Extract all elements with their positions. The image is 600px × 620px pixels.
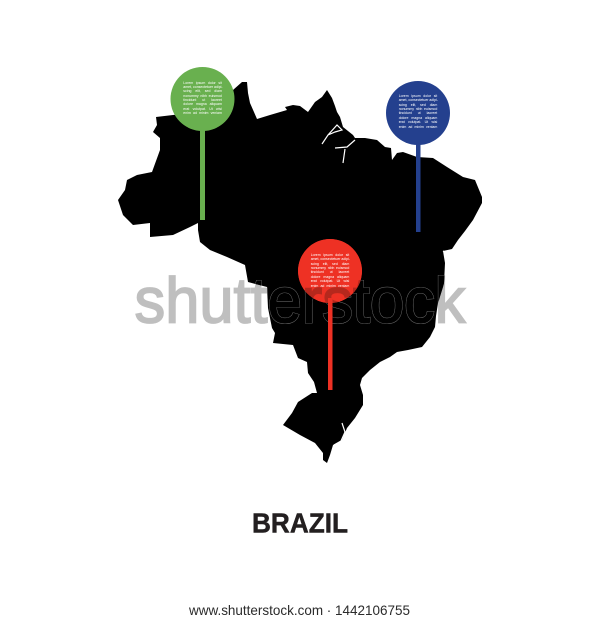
red pin text: enim ad minim veniam bbox=[311, 284, 349, 288]
green pin text: enim ad minim veniam bbox=[183, 111, 222, 115]
blue pin text: amet, consectetuer adipi- bbox=[399, 98, 438, 102]
blue pin text: enim ad minim veniam bbox=[399, 125, 437, 129]
green pin text: scing elit, sed diam bbox=[183, 89, 222, 93]
green pin text: tincidunt ut laoreet bbox=[183, 98, 222, 102]
green pin text: nonummy nibh euismod bbox=[183, 94, 222, 98]
red pin text: dolore magna aliquam bbox=[311, 275, 349, 279]
blue pin text: nonummy nibh euismod bbox=[399, 107, 437, 111]
map silhouette bbox=[118, 82, 482, 463]
watermark: shutterstock bbox=[134, 264, 466, 336]
watermark bbox=[135, 239, 467, 324]
watermark: shutterstock bbox=[134, 264, 466, 336]
red pin stem bbox=[328, 298, 332, 390]
green pin text: erat volutpat. Ut wisi bbox=[183, 107, 222, 111]
blue pin text: dolore magna aliquam bbox=[399, 116, 437, 120]
blue pin text: tincidunt ut laoreet bbox=[399, 111, 437, 115]
blue pin text: scing elit, sed diam bbox=[399, 103, 437, 107]
blue pin circle bbox=[386, 81, 450, 145]
blue pin stem bbox=[416, 140, 420, 232]
red pin circle bbox=[298, 239, 362, 303]
red pin text: scing elit, sed diam bbox=[311, 262, 349, 266]
red pin text: tincidunt ut laoreet bbox=[311, 270, 349, 274]
red pin text: nonummy nibh euismod bbox=[311, 266, 349, 270]
blue pin text: erat volutpat. Ut wisi bbox=[399, 120, 437, 124]
green pin text: dolore magna aliquam bbox=[183, 102, 222, 106]
map of Brazil with pins and watermark bbox=[118, 67, 482, 463]
footer url: www.shutterstock.com · 1442106755 bbox=[188, 602, 410, 618]
title: BRAZIL bbox=[252, 508, 348, 538]
red pin text: erat volutpat. Ut wisi bbox=[311, 279, 349, 283]
red pin text bbox=[310, 253, 350, 288]
green pin stem bbox=[200, 125, 205, 220]
blue pin text bbox=[398, 94, 438, 129]
watermark: shutterstock bbox=[134, 264, 466, 336]
red pin text: Lorem ipsum dolor sit bbox=[311, 253, 349, 257]
green pin circle bbox=[170, 67, 234, 131]
blue pin text: Lorem ipsum dolor sit bbox=[399, 94, 437, 98]
green pin text bbox=[183, 80, 223, 115]
red pin text: amet, consectetuer adipi- bbox=[311, 257, 350, 261]
green pin text: Lorem ipsum dolor sit bbox=[183, 80, 222, 84]
watermark: shutterstock bbox=[134, 264, 466, 336]
green pin text: amet, consectetuer adipi- bbox=[183, 85, 223, 89]
